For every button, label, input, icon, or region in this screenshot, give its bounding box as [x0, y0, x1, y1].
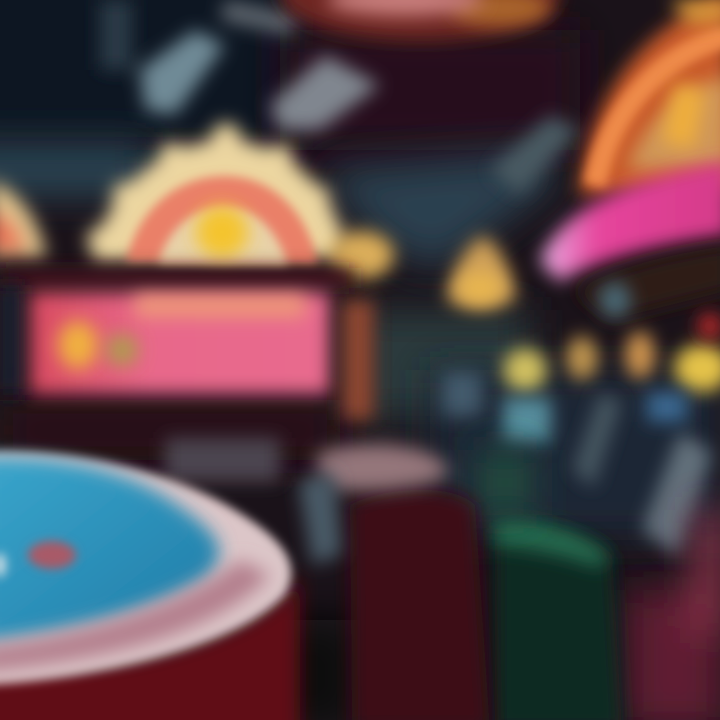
slot machines row — [430, 282, 720, 556]
neon arch and pink canopy, right — [540, 0, 720, 320]
grey chair back — [165, 438, 280, 482]
green jacket figure — [480, 450, 622, 720]
pink sign board — [0, 268, 374, 420]
ceiling light streaks — [100, 0, 580, 195]
pink floor, lower right — [625, 510, 720, 720]
hanging lamp — [446, 236, 516, 308]
small arch, far left — [0, 180, 46, 258]
blue casino table with white rim — [0, 452, 300, 720]
dark red jacket figure — [298, 444, 490, 720]
roulette wheel at the top — [280, 0, 560, 41]
illuminated arch sign with scalloped edge — [87, 123, 394, 279]
